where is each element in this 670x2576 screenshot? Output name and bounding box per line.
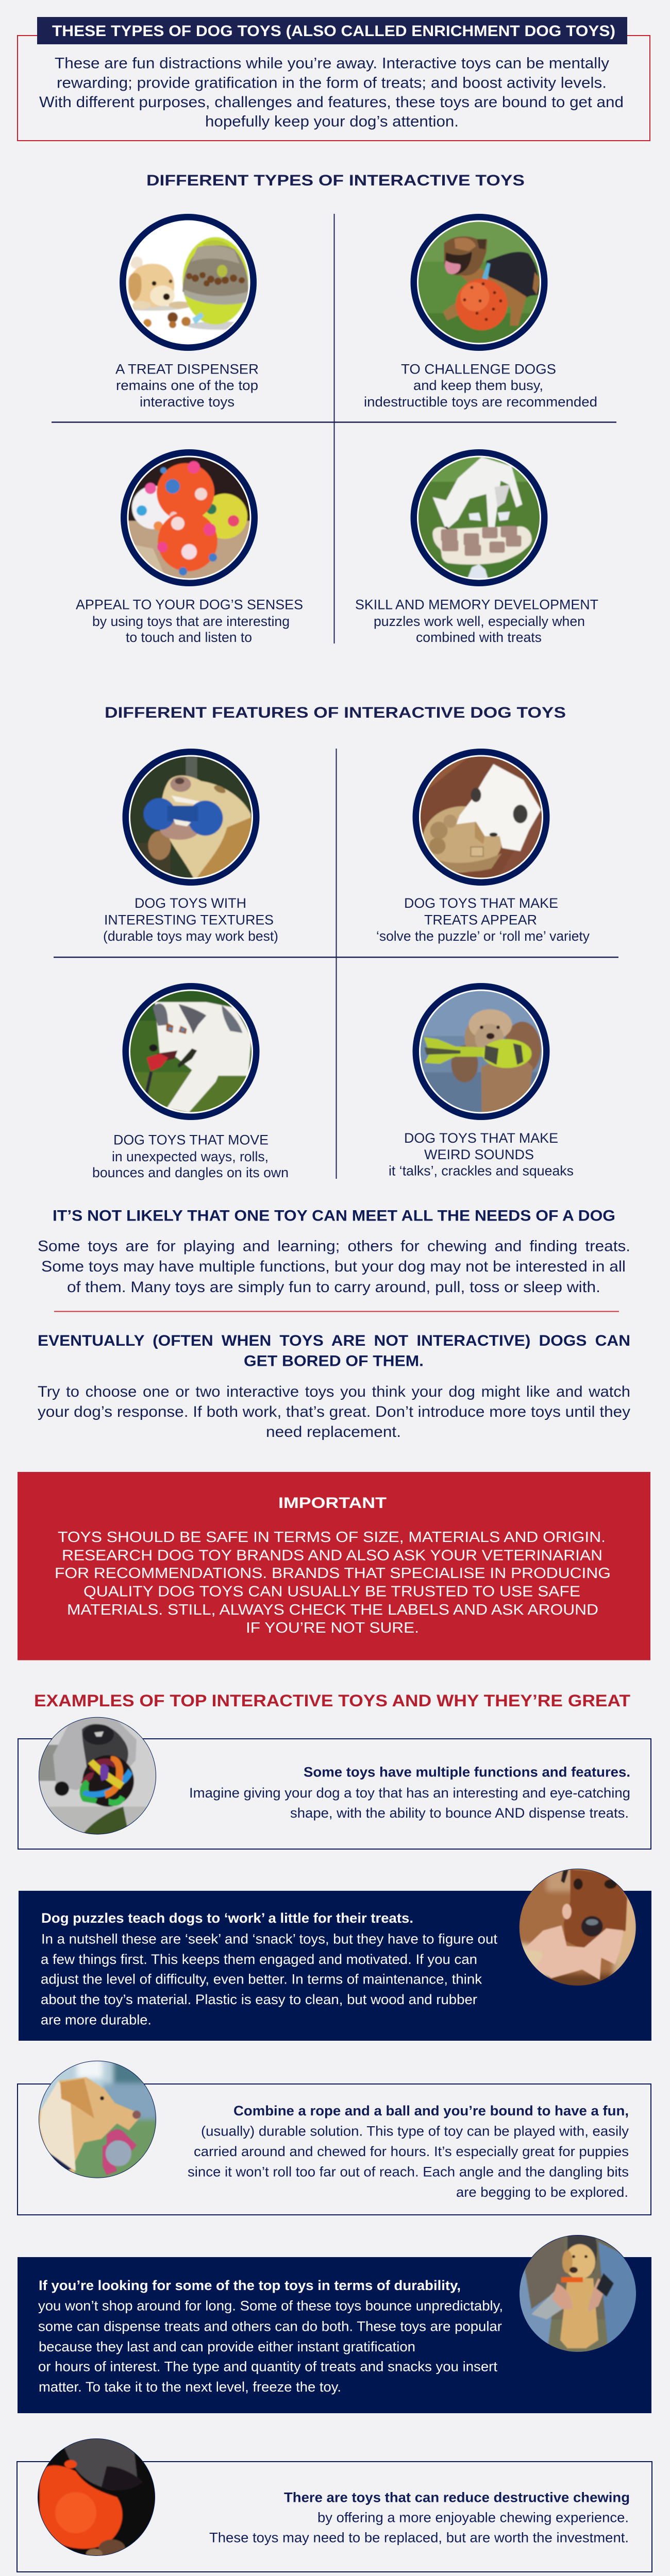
- text: example 5: by offering a more enjoyable chewing experience.: [317, 2510, 629, 2526]
- panel: features grid: [54, 749, 618, 1180]
- panel: example 2 dog puzzles: [19, 1866, 651, 2041]
- caption: treat dispenser: [115, 362, 259, 410]
- caption: skill and memory: [355, 597, 598, 645]
- heading: different features: DIFFERENT FEATURES OF INTERACTIVE DOG TOYS: [105, 704, 566, 721]
- text: example 4: matter. To take it to the next level, freeze the toy.: [39, 2379, 341, 2395]
- photo: white dog with bone puzzle: [410, 449, 547, 586]
- intro text: These are fun distractions while you’re away. Interactive toys can be mentally: [55, 55, 609, 72]
- text: example 5: [209, 2489, 630, 2545]
- photo: treat dispenser and puppy: [120, 214, 257, 351]
- text: example 1: Imagine giving your dog a toy that has an interesting and eye-catching: [189, 1785, 630, 1801]
- intro text: hopefully keep your dog’s attention.: [205, 113, 459, 130]
- text: example 3: (usually) durable solution. This type of toy can be played with, easily: [201, 2123, 629, 2139]
- intro text: With different purposes, challenges and features, these toys are bound to get and: [39, 94, 624, 111]
- caption: skill and memory: puzzles work well, especially when: [374, 614, 585, 629]
- important text: QUALITY DOG TOYS CAN USUALLY BE TRUSTED TO USE SAFE: [83, 1584, 580, 1600]
- caption: appeal to senses: to touch and listen to: [126, 630, 252, 645]
- heading: bored: GET BORED OF THEM.: [244, 1353, 424, 1369]
- caption: skill and memory: SKILL AND MEMORY DEVELOPMENT: [355, 597, 598, 613]
- text: example 4: [38, 2278, 503, 2395]
- text: example 2: In a nutshell these are ‘seek’ and ‘snack’ toys, but they have to figure out: [41, 1931, 497, 1946]
- caption: treats appear: TREATS APPEAR: [424, 912, 537, 927]
- photo: terrier with plush toy: [516, 1866, 640, 1989]
- photo: puppy between owner's knees: [516, 2232, 640, 2355]
- text: example 4: or hours of interest. The type and quantity of treats and snacks you insert: [38, 2359, 497, 2374]
- intro text: [39, 55, 624, 130]
- photo: dog with orange ball on grass: [410, 214, 547, 351]
- photo: dog with blue textured toy: [123, 749, 260, 886]
- caption: appeal to senses: by using toys that are interesting: [92, 614, 290, 629]
- intro title bar: [37, 17, 627, 44]
- panel: example 3 rope and ball: [18, 2058, 651, 2215]
- text block: choose toys: [38, 1383, 630, 1440]
- caption: textures: (durable toys may work best): [103, 928, 278, 944]
- text block: toy needs: Some toys may have multiple functions, but your dog may not be interested in all: [41, 1258, 626, 1275]
- caption: treats appear: ‘solve the puzzle’ or ‘roll me’ variety: [376, 928, 590, 944]
- heading: different types: DIFFERENT TYPES OF INTERACTIVE TOYS: [146, 172, 525, 189]
- text: example 2: adjust the level of difficulty, even better. In terms of maintenance, think: [41, 1971, 482, 1987]
- caption: textures: INTERESTING TEXTURES: [104, 912, 274, 927]
- caption: toys that move: in unexpected ways, rolls,: [112, 1149, 269, 1164]
- caption: challenge dogs: and keep them busy,: [413, 378, 543, 393]
- intro title bar: THESE TYPES OF DOG TOYS (ALSO CALLED ENRICHMENT DOG TOYS): [52, 23, 615, 40]
- text: example 3: are begging to be explored.: [456, 2184, 628, 2200]
- caption: weird sounds: DOG TOYS THAT MAKE: [404, 1130, 558, 1146]
- text: example 3: [188, 2103, 629, 2200]
- photo: dog with woven colourful ball: [36, 1714, 159, 1838]
- caption: toys that move: DOG TOYS THAT MOVE: [113, 1132, 269, 1147]
- important text: IF YOU’RE NOT SURE.: [246, 1620, 419, 1636]
- text block: toy needs: Some toys are for playing and learning; others for chewing and finding treats.: [38, 1238, 630, 1255]
- text: example 3: since it won’t roll too far out of reach. Each angle and the dangling bits: [188, 2164, 629, 2179]
- text: example 2: a few things first. This keeps them engaged and motivated. If you can: [41, 1952, 477, 1967]
- caption: toys that move: [92, 1132, 289, 1180]
- caption: weird sounds: WEIRD SOUNDS: [424, 1147, 534, 1162]
- text: example 4: some can dispense treats and others can do both. These toys are popular: [38, 2318, 502, 2334]
- text: example 2: are more durable.: [41, 2012, 152, 2028]
- important text: RESEARCH DOG TOY BRANDS AND ALSO ASK YOUR VETERINARIAN: [62, 1548, 602, 1564]
- photo: spaniel with lime toy: [412, 983, 549, 1120]
- text: example 5: These toys may need to be replaced, but are worth the investment.: [209, 2530, 629, 2545]
- caption: appeal to senses: [76, 597, 303, 645]
- important text: TOYS SHOULD BE SAFE IN TERMS OF SIZE, MATERIALS AND ORIGIN.: [58, 1529, 606, 1546]
- heading: bored: [38, 1332, 630, 1369]
- text: example 2: about the toy’s material. Plastic is easy to clean, but wood and rubber: [41, 1992, 477, 2007]
- photo: labrador with rope ball: [36, 2058, 159, 2181]
- caption: textures: [103, 895, 278, 944]
- text block: toy needs: of them. Many toys are simply fun to carry around, pull, toss or sleep with.: [67, 1279, 600, 1296]
- heading: one toy: IT’S NOT LIKELY THAT ONE TOY CAN MEET ALL THE NEEDS OF A DOG: [53, 1207, 615, 1224]
- panel: types grid: [52, 214, 616, 645]
- caption: challenge dogs: indestructible toys are recommended: [364, 394, 597, 410]
- caption: treat dispenser: remains one of the top: [116, 378, 258, 393]
- photo: spiky soccer balls: [121, 449, 258, 586]
- important text: [55, 1529, 611, 1636]
- intro text: rewarding; provide gratification in the form of treats; and boost activity levels.: [57, 74, 607, 91]
- panel: example 5 destructive chewing: [17, 2435, 652, 2572]
- text: example 1: shape, with the ability to bounce AND dispense treats.: [290, 1805, 629, 1821]
- heading: examples: EXAMPLES OF TOP INTERACTIVE TOYS AND WHY THEY’RE GREAT: [34, 1691, 631, 1710]
- caption: textures: DOG TOYS WITH: [135, 895, 246, 911]
- text block: choose toys: Try to choose one or two interactive toys you think your dog might like and watch: [38, 1383, 630, 1400]
- caption: treats appear: [376, 895, 590, 944]
- photo: merle dog with red toy: [123, 983, 260, 1120]
- heading: bored: EVENTUALLY (OFTEN WHEN TOYS ARE NOT INTERACTIVE) DOGS CAN: [38, 1332, 630, 1349]
- text block: choose toys: your dog’s response. If both work, that’s great. Don’t introduce more toys until they: [38, 1403, 630, 1420]
- caption: challenge dogs: TO CHALLENGE DOGS: [401, 362, 556, 377]
- text block: toy needs: [38, 1238, 630, 1296]
- caption: treat dispenser: A TREAT DISPENSER: [115, 362, 259, 377]
- caption: toys that move: bounces and dangles on its own: [92, 1165, 289, 1180]
- important text: MATERIALS. STILL, ALWAYS CHECK THE LABELS AND ASK AROUND: [67, 1602, 598, 1618]
- text: example 4: you won’t shop around for long. Some of these toys bounce unpredictably,: [38, 2298, 503, 2314]
- important heading: IMPORTANT: [278, 1495, 387, 1512]
- text: example 1: [189, 1764, 630, 1821]
- caption: appeal to senses: APPEAL TO YOUR DOG’S SENSES: [76, 597, 303, 613]
- text: example 4: If you’re looking for some of the top toys in terms of durability,: [39, 2278, 461, 2293]
- text: example 2: [41, 1910, 497, 2028]
- panel: important: [18, 1472, 650, 1660]
- caption: weird sounds: [389, 1130, 574, 1179]
- caption: challenge dogs: [364, 362, 597, 410]
- photo: black dog with red ball: [35, 2435, 158, 2559]
- text: example 5: There are toys that can reduce destructive chewing: [284, 2489, 630, 2505]
- text: example 4: because they last and can provide either instant gratification: [39, 2339, 415, 2354]
- text: example 2: Dog puzzles teach dogs to ‘work’ a little for their treats.: [41, 1910, 413, 1926]
- caption: treat dispenser: interactive toys: [140, 394, 234, 410]
- caption: weird sounds: it ‘talks’, crackles and squeaks: [389, 1163, 574, 1179]
- text: example 3: Combine a rope and a ball and you’re bound to have a fun,: [233, 2103, 629, 2119]
- text: example 1: Some toys have multiple functions and features.: [304, 1764, 630, 1780]
- caption: treats appear: DOG TOYS THAT MAKE: [404, 895, 558, 911]
- panel: example 1 multiple functions: [18, 1714, 651, 1849]
- panel: intro: [18, 17, 650, 141]
- panel: example 4 durability: [18, 2232, 651, 2413]
- caption: skill and memory: combined with treats: [416, 630, 542, 645]
- important text: FOR RECOMMENDATIONS. BRANDS THAT SPECIALISE IN PRODUCING: [55, 1565, 611, 1582]
- intro border: [18, 36, 650, 141]
- text block: choose toys: need replacement.: [266, 1423, 401, 1440]
- text: example 3: carried around and chewed for hours. It’s especially great for puppies: [194, 2144, 629, 2159]
- photo: puppy at wooden puzzle: [412, 749, 549, 886]
